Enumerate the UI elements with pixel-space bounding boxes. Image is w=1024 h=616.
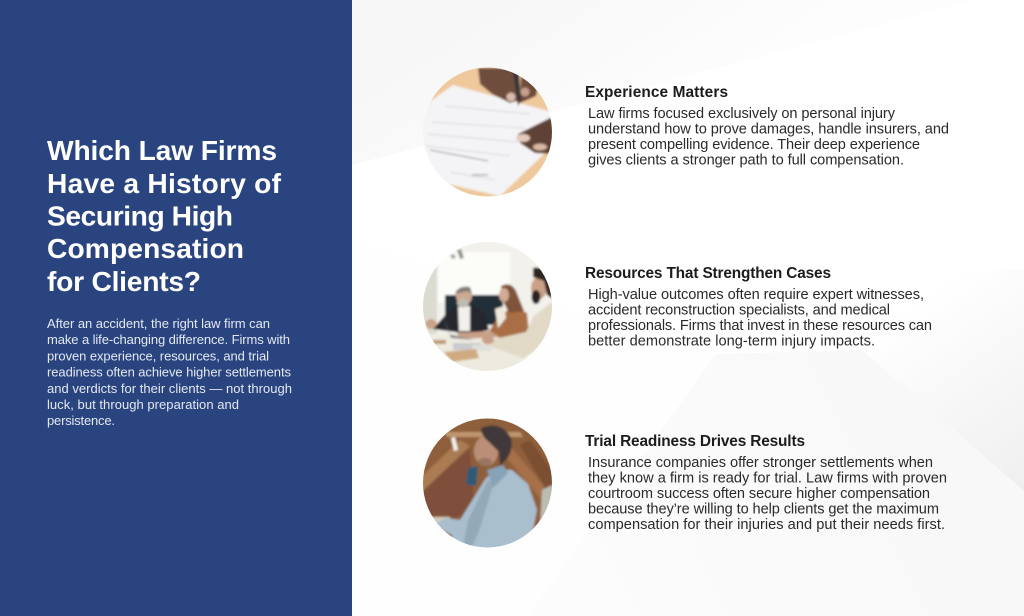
body: experience matters	[588, 106, 949, 168]
photo: man speaking in a loft	[423, 418, 552, 548]
body: experience matters: present compelling evidence. Their deep experience	[588, 137, 920, 153]
body: trial readiness: courtroom success often secure higher compensation	[588, 486, 930, 502]
body: trial readiness: they know a firm is ready for trial. Law firms with proven	[588, 470, 947, 486]
body: trial readiness: because they’re willing to help clients get the maximum	[588, 502, 939, 518]
heading: experience matters: Experience Matters	[585, 84, 728, 101]
title: Which Law Firms	[47, 134, 277, 166]
panel: left blue sidebar	[0, 0, 352, 616]
intro paragraph: luck, but through preparation and	[47, 397, 239, 412]
intro paragraph: persistence.	[47, 413, 115, 428]
body: resources: accident reconstruction specialists, and medical	[588, 302, 890, 318]
heading: trial readiness: Trial Readiness Drives Results	[585, 433, 805, 450]
body: resources: High-value outcomes often require expert witnesses,	[588, 287, 924, 303]
photo: business team meeting	[423, 242, 552, 371]
item 2: resources that strengthen cases	[585, 265, 932, 350]
intro paragraph: readiness often achieve higher settlements	[47, 364, 292, 380]
body: resources: professionals. Firms that invest in these resources can	[588, 318, 932, 334]
intro paragraph	[47, 316, 292, 428]
body: trial readiness	[588, 455, 947, 533]
background: white facets	[352, 0, 1024, 616]
body: experience matters: Law firms focused exclusively on personal injury	[588, 106, 896, 122]
title: Securing High	[47, 200, 233, 232]
title: for Clients?	[47, 265, 201, 297]
title: Compensation	[47, 232, 244, 264]
body: experience matters: understand how to prove damages, handle insurers, and	[588, 122, 949, 138]
photo: hands signing a document	[424, 68, 552, 196]
body: experience matters: gives clients a stronger path to full compensation.	[588, 152, 904, 168]
title: Have a History of	[47, 167, 282, 199]
item 3: trial readiness drives results	[585, 433, 947, 533]
body: trial readiness: compensation for their injuries and put their needs first.	[588, 517, 945, 533]
item 1: experience matters	[585, 84, 949, 168]
intro paragraph: and verdicts for their clients — not through	[47, 381, 292, 396]
title	[47, 134, 282, 297]
intro paragraph: After an accident, the right law firm can	[47, 316, 270, 331]
body: trial readiness: Insurance companies offer stronger settlements when	[588, 455, 933, 471]
intro paragraph: proven experience, resources, and trial	[47, 348, 269, 364]
intro paragraph: make a life-changing difference. Firms with	[47, 332, 290, 347]
body: resources	[588, 287, 932, 350]
body: resources: better demonstrate long-term injury impacts.	[588, 334, 875, 350]
heading: resources: Resources That Strengthen Cases	[585, 265, 831, 282]
